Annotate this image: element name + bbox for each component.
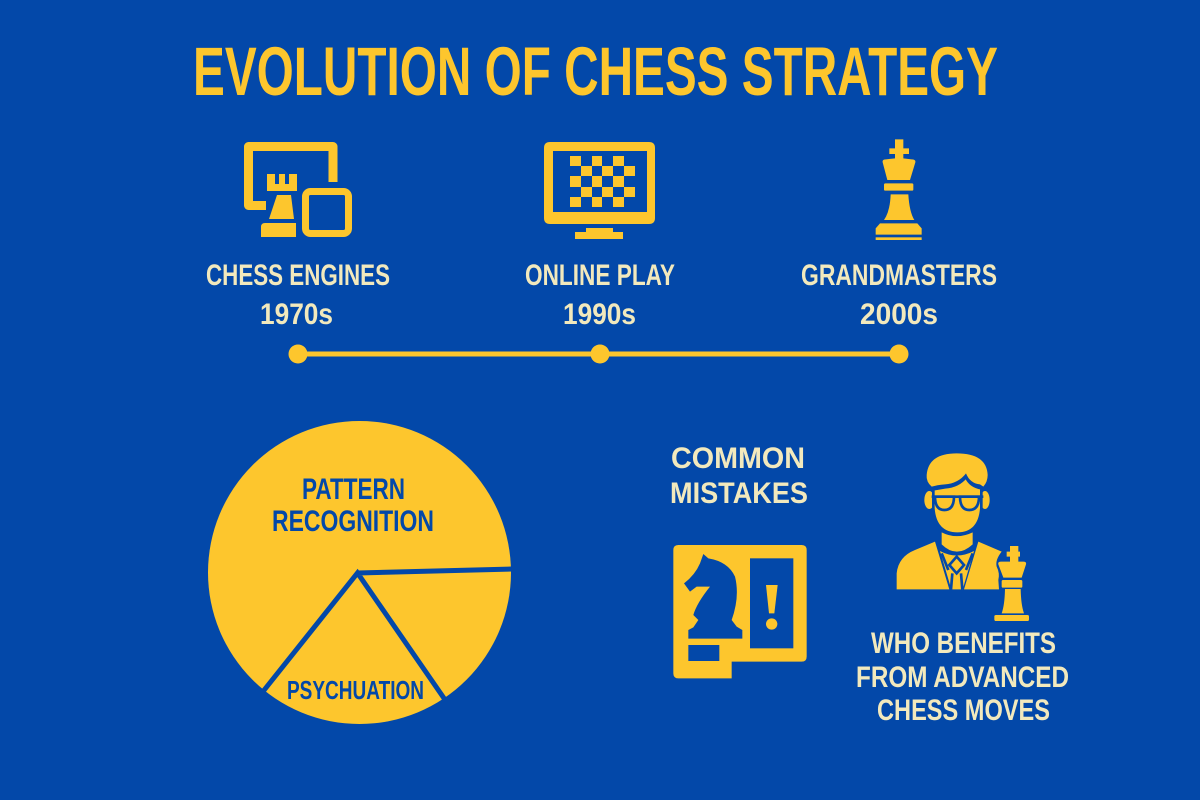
heading: common mistakes	[670, 442, 808, 510]
icon: rook with monitor and tablet	[248, 146, 348, 237]
icon: monitor with chessboard	[544, 142, 655, 239]
label: chess engines 1970s: CHESS ENGINES	[206, 259, 390, 292]
timeline axis with dots	[288, 344, 908, 364]
pie label: pattern recognition: RECOGNITION	[272, 505, 434, 538]
heading: common mistakes: COMMON	[671, 442, 805, 475]
icon: person with glasses and king	[897, 453, 1029, 621]
label: chess engines 1970s	[206, 259, 390, 331]
label: grandmasters 2000s: 2000s	[860, 298, 938, 331]
person head	[924, 453, 990, 534]
person torso and tie	[897, 532, 1002, 589]
icon: knight with exclamation card	[673, 545, 807, 678]
label: online play 1990s	[525, 259, 675, 331]
pie chart	[208, 421, 512, 724]
icon: king	[876, 139, 922, 240]
label: who benefits: WHO BENEFITS	[871, 627, 1056, 660]
heading: common mistakes: MISTAKES	[670, 477, 808, 510]
timeline stage: online play	[525, 142, 675, 331]
pie label: pattern recognition	[272, 473, 434, 538]
small king	[994, 546, 1029, 621]
label: chess engines 1970s: 1970s	[260, 298, 333, 331]
label: who benefits: CHESS MOVES	[877, 694, 1050, 727]
label: online play 1990s: ONLINE PLAY	[525, 259, 675, 292]
timeline stage: grandmasters	[801, 139, 997, 331]
pie label: pattern recognition: PATTERN	[302, 473, 405, 506]
label: grandmasters 2000s	[801, 259, 997, 331]
label: online play 1990s: 1990s	[563, 298, 636, 331]
label: who benefits	[856, 627, 1069, 727]
pie label: psychuation: PSYCHUATION	[287, 675, 424, 705]
label: who benefits: FROM ADVANCED	[856, 661, 1069, 694]
timeline stage: chess engines	[206, 146, 390, 331]
label: grandmasters 2000s: GRANDMASTERS	[801, 259, 997, 292]
